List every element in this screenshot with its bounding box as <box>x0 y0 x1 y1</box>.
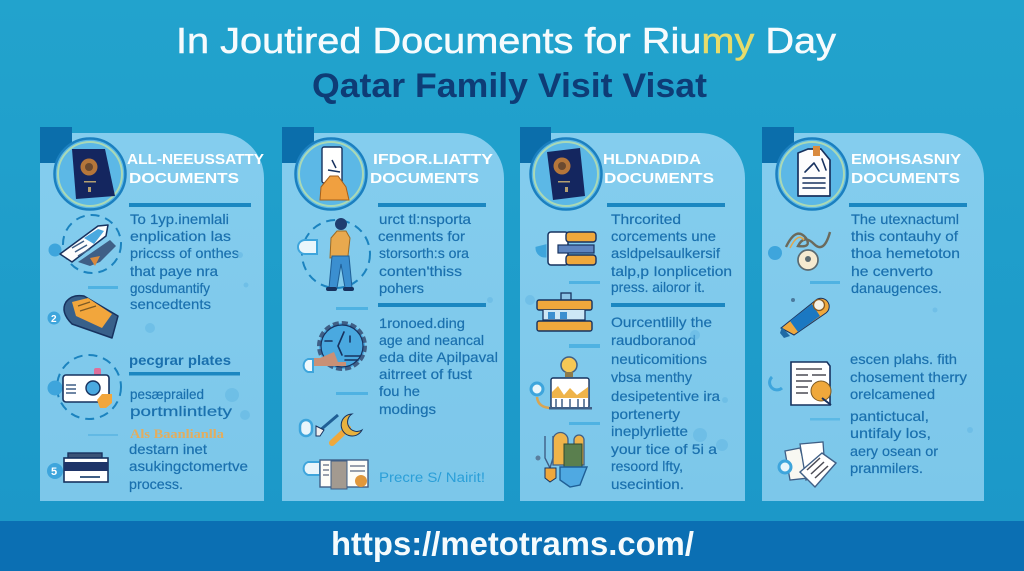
icon: gear with hand <box>304 323 365 372</box>
text block: age and neancal <box>379 332 484 348</box>
icon: swirl <box>768 232 830 270</box>
heading: EMOHSASNIY <box>851 151 961 168</box>
icon: document and hand <box>296 138 366 210</box>
text block: aitrreet of fust <box>379 366 472 382</box>
text block: danaugences. <box>851 280 942 296</box>
icon: tools <box>300 414 362 443</box>
footer url: https://metotrams.com/ <box>331 525 694 562</box>
icon: person <box>298 218 370 291</box>
icon: bank card stack: 5 <box>51 466 57 478</box>
text block <box>130 211 239 312</box>
text block: resoord lfty, <box>611 458 683 474</box>
heading: HLDNADIDA <box>603 151 701 168</box>
text block: desipetentive ira <box>611 388 720 404</box>
text block: To 1yp.inemlali <box>130 211 229 227</box>
icon: open book <box>304 460 368 489</box>
icon: orange wallet: 2 <box>51 314 57 325</box>
subheading: pecgrar plates <box>129 352 231 368</box>
text block: portenerty <box>611 406 680 422</box>
text block: Thrcorited <box>611 211 681 227</box>
text block: press. ailoror it. <box>611 279 705 295</box>
panel: all-necessary documents: DOCUMENTS <box>129 170 239 187</box>
text block: neuticomitions <box>611 351 707 367</box>
panel: identity documents: DOCUMENTS <box>370 170 479 187</box>
text block: talp,p Ionplicetion <box>611 263 732 279</box>
text block <box>378 211 471 296</box>
text block <box>611 211 732 295</box>
text block: ineplyrliette <box>611 423 688 439</box>
text block: modings <box>379 401 436 417</box>
text block: corcements une <box>611 228 716 244</box>
icon: passport <box>530 138 602 210</box>
icon: orange wallet <box>48 296 118 338</box>
title: In Joutired Documents for Riu my Day <box>176 20 836 61</box>
text block: escen plahs. fith <box>850 351 957 367</box>
text block: raudboranod <box>611 332 696 348</box>
text block: sencedtents <box>130 296 211 312</box>
text block: pohers <box>379 280 424 296</box>
text block <box>611 314 720 492</box>
text block: asldpelsaulkersif <box>611 245 720 261</box>
icon: folders <box>537 232 596 265</box>
text block: pranmilers. <box>850 460 923 476</box>
panel: holding documents: DOCUMENTS <box>604 170 714 187</box>
text block: chosement therry <box>850 369 967 385</box>
panel: identity documents <box>282 127 504 501</box>
text block: Ourcentlilly the <box>611 314 712 330</box>
text block: portmlintlety <box>130 403 232 419</box>
icon: stack of papers <box>779 442 836 487</box>
text block: asukingctomertve <box>129 458 248 474</box>
text block: aery osean or <box>850 443 938 459</box>
icon: passport <box>54 138 126 210</box>
text block <box>851 211 960 296</box>
text block: thoa hemetoton <box>851 245 960 261</box>
text block: enplication las <box>130 228 231 244</box>
caption: Precre S/ Nairit! <box>379 470 485 485</box>
text block: process. <box>129 476 183 492</box>
panel: emergency documents: DOCUMENTS <box>851 170 960 187</box>
icon: telescope <box>780 298 829 338</box>
text block: destarn inet <box>129 441 207 457</box>
text block: 1ronoed.ding <box>379 315 465 331</box>
text block: fou he <box>379 383 420 399</box>
subtitle: Qatar Family Visit Visat <box>312 67 707 105</box>
text block: your tice of 5i a <box>611 441 717 457</box>
text block <box>379 315 498 417</box>
text block: gosdumantify <box>130 280 210 296</box>
icon: document <box>776 138 848 210</box>
text block: priccss of onthes <box>130 245 239 261</box>
text block: Als Baanlianlla <box>130 426 225 441</box>
text block: that paye nra <box>130 263 218 279</box>
icon: phone in hand <box>48 215 121 273</box>
text block: urct tl:nsporta <box>379 211 471 227</box>
text block <box>129 386 248 492</box>
icon: certificate <box>770 362 831 405</box>
text block: this contauhy of <box>851 228 958 244</box>
text block: pesæprailed <box>130 386 204 402</box>
heading: ALL-NEEUSSATTY <box>127 151 264 168</box>
panel: all-necessary documents <box>40 127 264 501</box>
text block: untifaly los, <box>850 425 931 441</box>
text block <box>850 351 967 476</box>
text block: vbsa menthy <box>611 369 692 385</box>
icon: orange server <box>537 293 592 331</box>
text block: usecintion. <box>611 476 684 492</box>
panel: emergency documents <box>762 127 984 501</box>
text block: orelcamened <box>850 386 935 402</box>
text block: conten'thiss <box>379 263 462 279</box>
text block: pantictucal, <box>850 408 929 424</box>
icon: lightbulb and chart <box>531 357 592 410</box>
text block: storsorth:s ora <box>379 245 469 261</box>
text block: he cenverto <box>851 263 933 279</box>
text block: eda dite Apilpaval <box>379 349 498 365</box>
footer bar <box>0 521 1024 571</box>
icon: bank card stack <box>47 453 108 482</box>
text block: cenments for <box>378 228 465 244</box>
icon: supplies basket <box>536 432 587 487</box>
text block: The utexnactuml <box>851 211 959 227</box>
icon: id card with camera <box>48 355 121 419</box>
panel: holding documents <box>520 127 745 501</box>
heading: IFDOR.LIATTY <box>373 151 493 168</box>
